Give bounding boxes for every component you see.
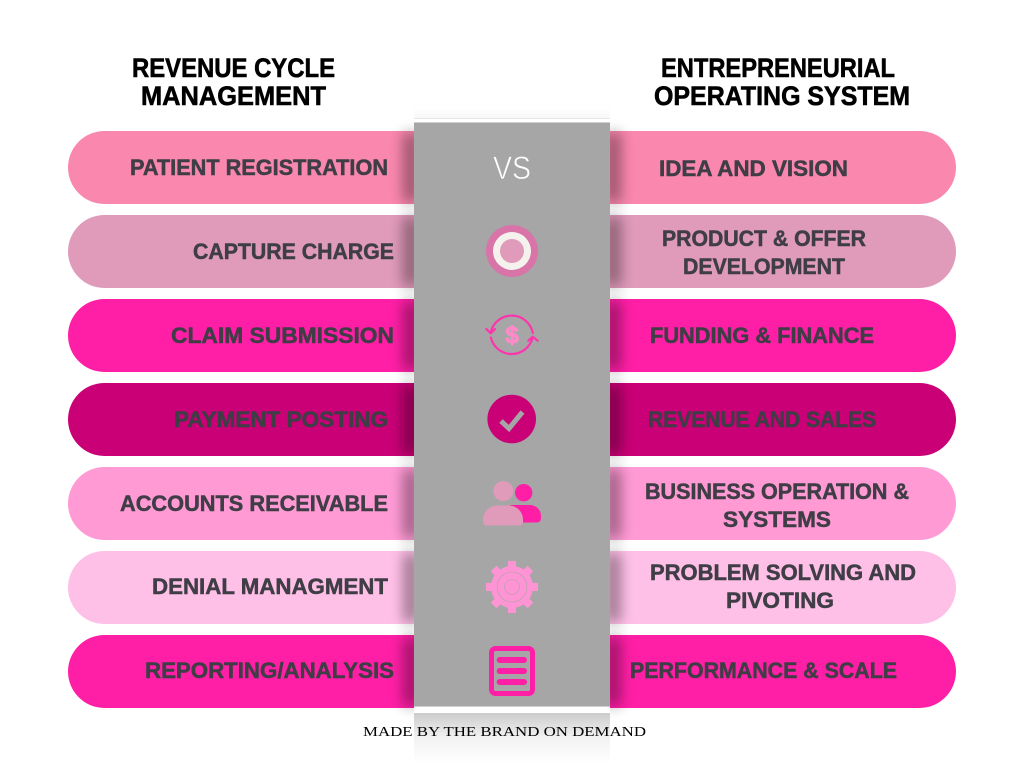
pill: capture charge: CAPTURE CHARGE [193,239,394,264]
pill: accounts receivable [68,467,418,540]
pill: claim submission: CLAIM SUBMISSION [171,323,394,348]
heading: entrepreneurial operating system: ENTREPRENEURIAL [661,53,895,83]
heading: revenue cycle management: REVENUE CYCLE [132,53,335,83]
pill: idea and vision: IDEA AND VISION [659,156,848,181]
label: VS: VS [493,150,531,186]
pill: problem solving and pivoting [606,551,956,624]
icon: document list [492,648,532,694]
pill: problem solving and pivoting: PIVOTING [726,588,834,613]
heading: revenue cycle management [132,53,335,111]
pill: reporting and analysis: REPORTING/ANALYSIS [145,658,394,683]
pill: funding and finance: FUNDING & FINANCE [650,323,874,348]
pill: funding and finance [606,299,956,372]
heading: revenue cycle management: MANAGEMENT [141,81,326,111]
pill: business operation and systems: SYSTEMS [723,507,831,532]
pill: product and offer development: DEVELOPMENT [683,254,846,279]
pill: product and offer development: PRODUCT & OFFER [662,226,866,251]
icon: check mark [487,395,536,443]
pill: payment posting: PAYMENT POSTING [174,407,388,432]
pill: reporting and analysis [68,635,418,708]
pill: claim submission [68,299,418,372]
icon: dollar cycle: $ [505,322,519,349]
heading: entrepreneurial operating system: OPERATING SYSTEM [654,81,910,111]
icon: dollar cycle [486,316,538,354]
icon: gear [486,561,538,613]
pill: business operation and systems [606,467,956,540]
pill: accounts receivable: ACCOUNTS RECEIVABLE [120,491,388,516]
pill: business operation and systems: BUSINESS OPERATION & [645,479,909,504]
pill: payment posting [68,383,418,456]
pill: idea and vision [606,131,956,204]
pill: performance and scale [606,635,956,708]
footer credit: MADE BY THE BRAND ON DEMAND [363,725,646,740]
pill: denial management: DENIAL MANAGMENT [152,574,389,599]
pill: revenue and sales: REVENUE AND SALES [648,407,876,432]
pill: performance and scale: PERFORMANCE & SCALE [630,658,897,683]
pill: capture charge [68,215,418,288]
pill: patient registration: PATIENT REGISTRATION [130,155,388,180]
icon: target ring [486,225,538,277]
pill: patient registration [68,131,418,204]
pill: product and offer development [606,215,956,288]
heading: entrepreneurial operating system [654,53,910,111]
pill: revenue and sales [606,383,956,456]
pill: problem solving and pivoting: PROBLEM SOLVING AND [650,560,916,585]
icon: people [483,481,541,526]
pill: denial management [68,551,418,624]
center column [414,108,610,763]
